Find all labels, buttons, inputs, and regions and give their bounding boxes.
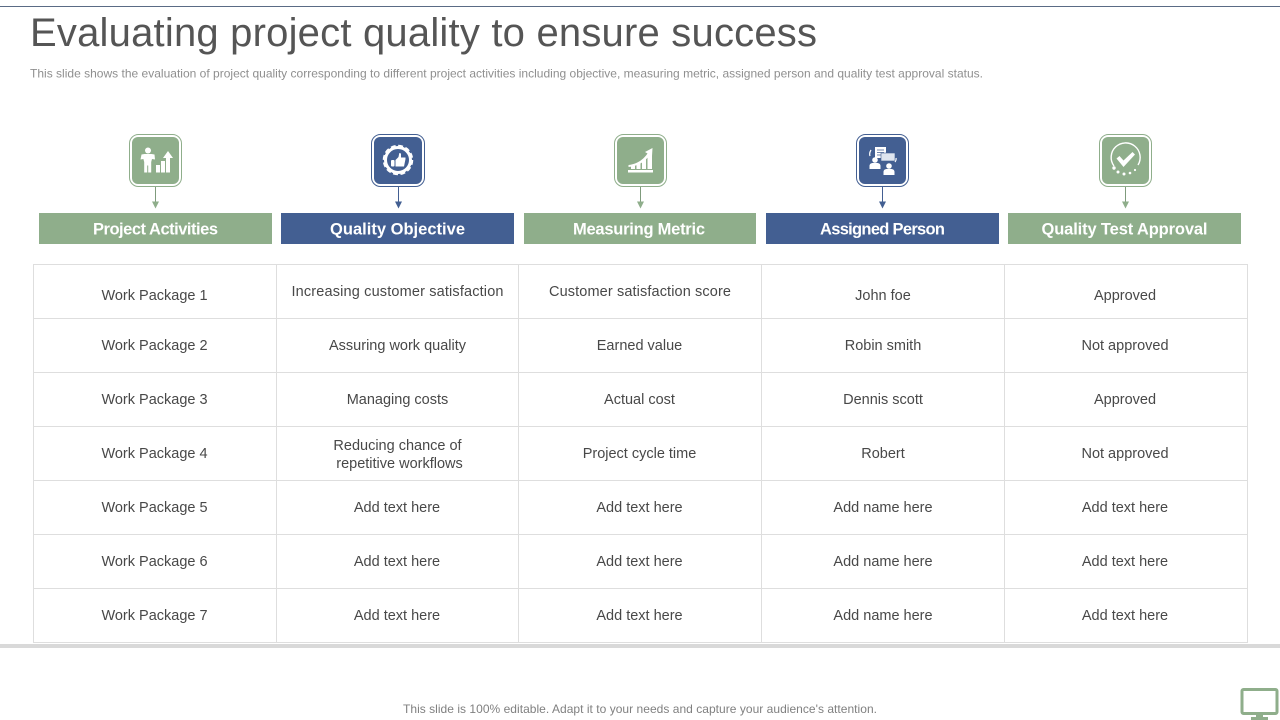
heading: Project Activities	[39, 213, 272, 244]
icon: check mark with dotted circle	[1100, 134, 1152, 186]
icon: person with growth bars	[130, 134, 182, 186]
table row 3: Approved	[1094, 392, 1156, 408]
table row 7: Add text here	[596, 608, 683, 624]
table row 6: Add text here	[354, 554, 440, 570]
table row 2: Earned value	[597, 338, 682, 354]
table row 1: Increasing customer satisfaction	[292, 284, 504, 300]
table row 2: Assuring work quality	[329, 338, 467, 354]
heading: Quality Objective: Quality Objective	[330, 220, 465, 238]
table row 4: Not approved	[1081, 446, 1169, 462]
table row 3	[101, 392, 1156, 408]
table row 2: Robin smith	[845, 338, 921, 354]
table row 7: Work Package 7	[101, 608, 208, 624]
table row 1: Customer satisfaction score	[549, 284, 731, 300]
column: Quality Test Approval header	[1008, 134, 1241, 244]
table row 6: Add name here	[833, 554, 933, 570]
table row 1: Approved	[1094, 288, 1156, 304]
heading: Measuring Metric: Measuring Metric	[573, 220, 705, 238]
heading: Project Activities: Project Activities	[93, 220, 218, 238]
heading: Measuring Metric	[524, 213, 756, 244]
arrow	[637, 187, 644, 208]
table row 4: repetitive workflows	[336, 456, 463, 472]
table row 3: Actual cost	[604, 392, 675, 408]
table row 3: Managing costs	[347, 392, 448, 408]
arrow	[152, 187, 159, 208]
table row 6	[101, 554, 1168, 570]
table row 4: Project cycle time	[583, 446, 696, 462]
table row 6: Work Package 6	[101, 554, 208, 570]
table row 4: Reducing chance of	[333, 438, 463, 454]
table row 4	[101, 438, 1169, 472]
table	[33, 264, 1248, 642]
table row 5: Add name here	[833, 500, 933, 516]
table row 2: Work Package 2	[101, 338, 208, 354]
table row 5	[101, 500, 1168, 516]
table row 2	[101, 338, 1169, 354]
table row 5: Add text here	[354, 500, 440, 516]
table row 1: John foe	[855, 288, 911, 304]
heading: Quality Test Approval: Quality Test Approval	[1042, 220, 1208, 238]
table row 6: Add text here	[596, 554, 683, 570]
table row 2: Not approved	[1081, 338, 1169, 354]
table row 5: Add text here	[1082, 500, 1168, 516]
arrow	[395, 187, 402, 208]
icon: thumbs up badge	[372, 134, 424, 186]
table row 7: Add text here	[1082, 608, 1168, 624]
heading: Assigned Person: Assigned Person	[820, 220, 945, 238]
table row 7: Add name here	[833, 608, 933, 624]
column: Quality Objective header	[281, 134, 514, 244]
table row 5: Work Package 5	[101, 500, 208, 516]
icon: rising chart	[614, 134, 666, 186]
icon: people discussing	[856, 134, 908, 186]
table row 1: Work Package 1	[101, 288, 208, 304]
footer note: This slide is 100% editable. Adapt it to your needs and capture your audience's attention.	[403, 702, 877, 716]
table row 4: Robert	[861, 446, 905, 462]
table row 3: Dennis scott	[843, 392, 923, 408]
table row 6: Add text here	[1082, 554, 1168, 570]
table row 5: Add text here	[596, 500, 683, 516]
icon: monitor	[1242, 690, 1277, 720]
heading: Quality Objective	[281, 213, 514, 244]
column: Measuring Metric header	[524, 134, 756, 244]
subtitle text: This slide shows the evaluation of project quality corresponding to different project activities including objective, measuring metric, assigned person and quality test approval status.	[30, 66, 983, 80]
table row 3: Work Package 3	[101, 392, 208, 408]
arrow	[879, 187, 886, 208]
title: Evaluating project quality to ensure success	[30, 11, 817, 55]
column: Project Activities header	[39, 134, 272, 244]
table row 4: Work Package 4	[101, 446, 208, 462]
table row 7	[101, 608, 1168, 624]
table row 7: Add text here	[354, 608, 440, 624]
heading: Quality Test Approval	[1008, 213, 1241, 244]
column: Assigned Person header	[766, 134, 999, 244]
arrow	[1122, 187, 1129, 208]
table row 1	[101, 284, 1156, 304]
heading: Assigned Person	[766, 213, 999, 244]
